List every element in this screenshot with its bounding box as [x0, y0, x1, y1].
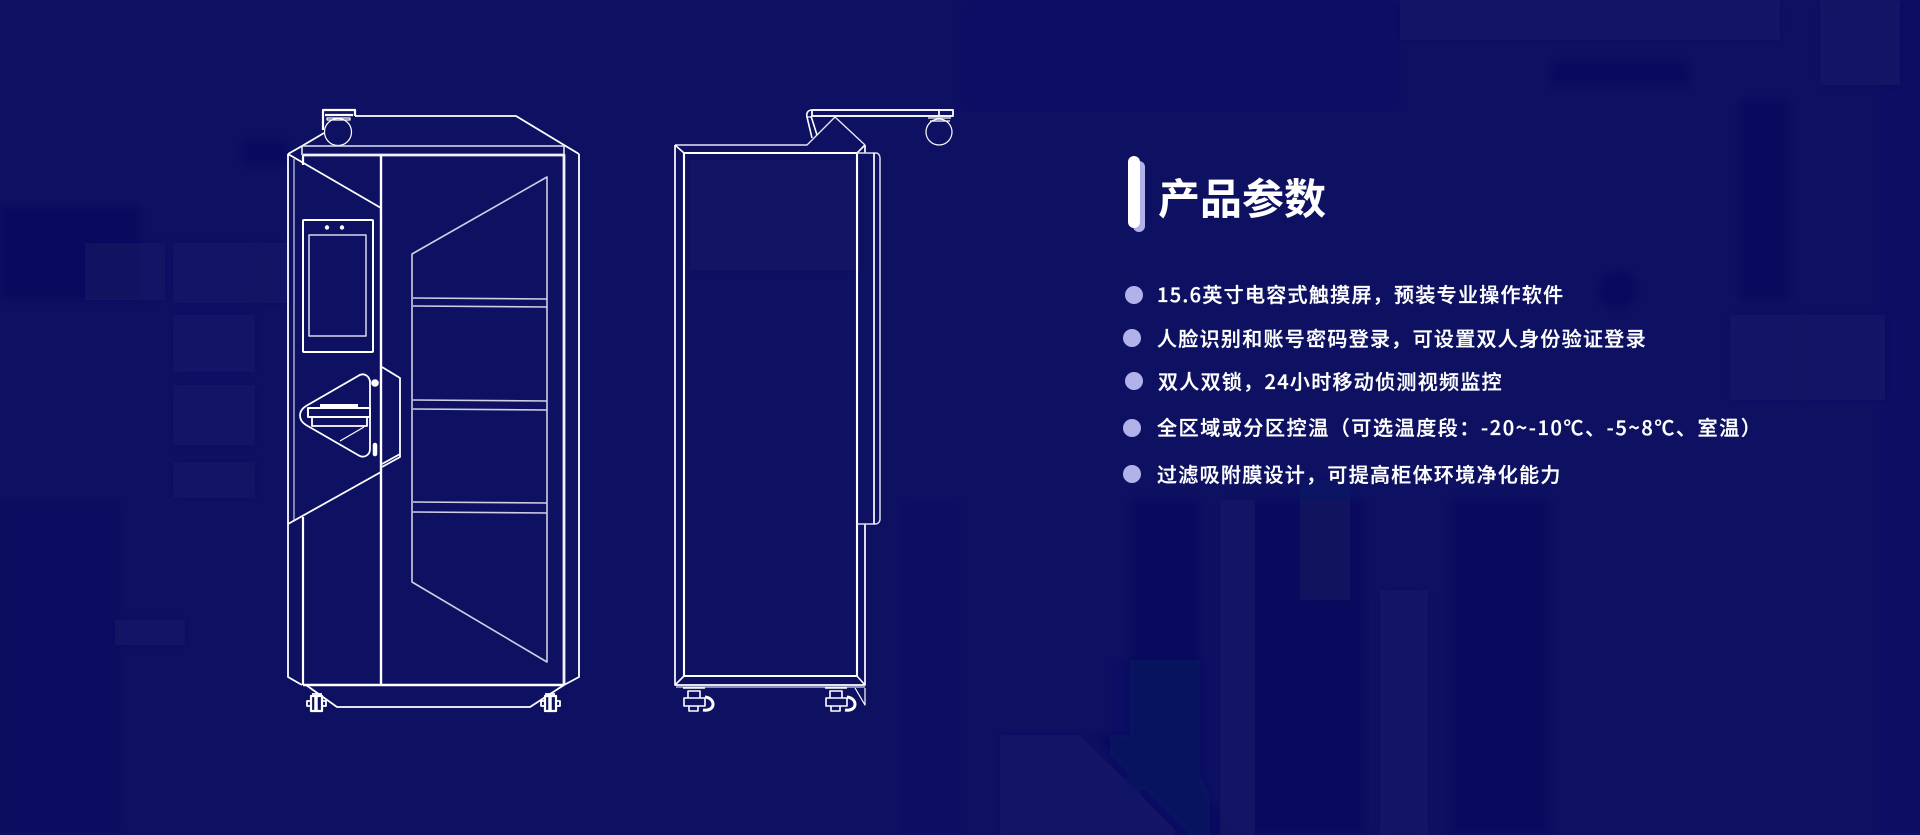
door handle strip: [857, 153, 880, 524]
touch screen: [303, 220, 373, 352]
glass window with shelves: [412, 177, 547, 662]
document tray: [300, 367, 400, 467]
bullet 1: [1125, 286, 1143, 304]
side body: [675, 117, 865, 705]
side caster right: [825, 688, 855, 711]
side caster left: [683, 688, 713, 711]
item 3: 双人双锁，24小时移动侦测视频监控: [1158, 366, 1503, 395]
item 5: 过滤吸附膜设计，可提高柜体环境净化能力: [1157, 459, 1562, 488]
parameter list: [1123, 279, 1762, 488]
cabinet top surface and camera: [288, 110, 579, 155]
front caster right: [541, 694, 560, 711]
left door panel: [288, 154, 381, 524]
front caster left: [307, 694, 326, 711]
title: 产品参数: [1158, 166, 1326, 227]
camera arm: [807, 110, 953, 145]
bullet 2: [1123, 329, 1141, 347]
item 2: 人脸识别和账号密码登录，可设置双人身份验证登录: [1157, 323, 1647, 352]
bullet 3: [1125, 372, 1143, 390]
cabinet base: [306, 685, 564, 707]
item 1: 15.6英寸电容式触摸屏，预装专业操作软件: [1157, 279, 1564, 308]
heading accent bar: [1128, 156, 1145, 232]
bullet 5: [1123, 465, 1141, 483]
item 4: 全区域或分区控温（可选温度段：-20~-10℃、-5~8℃、室温）: [1157, 412, 1762, 441]
cabinet body frame: [288, 154, 579, 685]
bullet 4: [1123, 419, 1141, 437]
